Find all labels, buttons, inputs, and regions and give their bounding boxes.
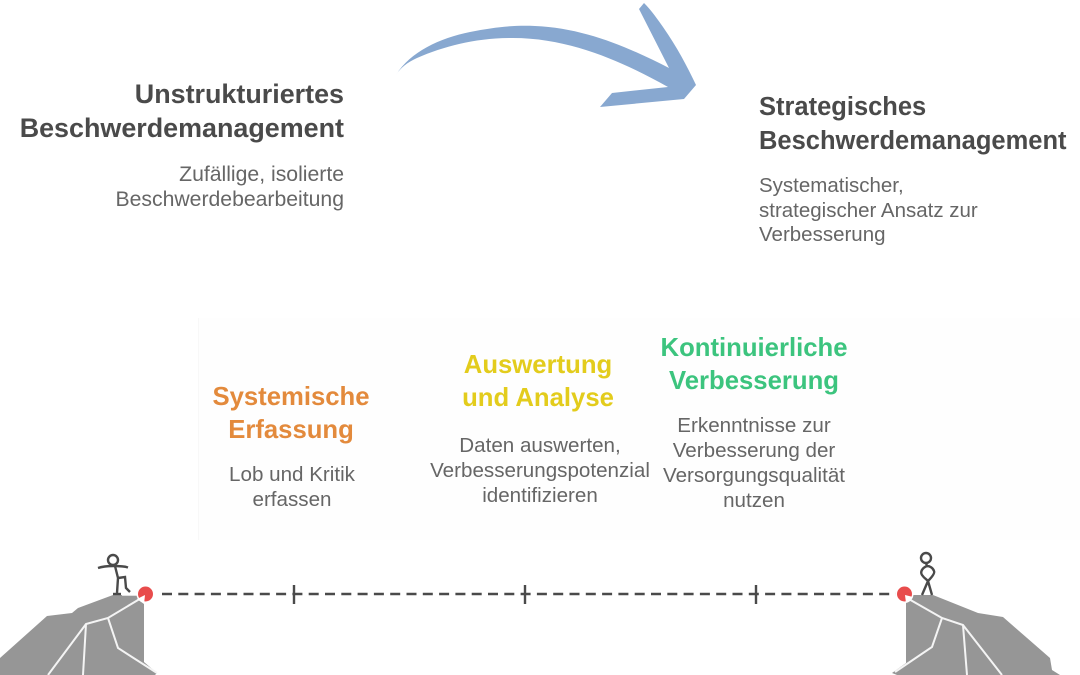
text: Auswertung und Analyse description: Verbesserungspotenzial [430, 459, 650, 482]
heading: Unstrukturiertes Beschwerdemanagement: Beschwerdemanagement [20, 113, 344, 143]
heading: Strategisches Beschwerdemanagement: Strategisches [759, 92, 926, 120]
text: Kontinuierliche Verbesserung description: Versorgungsqualität [663, 464, 845, 487]
heading: Auswertung und Analyse: Auswertung [464, 351, 612, 379]
heading: Kontinuierliche Verbesserung: Kontinuierliche [661, 334, 847, 362]
heading: Kontinuierliche Verbesserung [661, 334, 847, 395]
text: Kontinuierliche Verbesserung description [663, 414, 845, 512]
heading: Systemische Erfassung: Systemische [212, 383, 370, 411]
text: unstructured description [115, 163, 344, 211]
heading: Strategisches Beschwerdemanagement: Beschwerdemanagement [759, 126, 1067, 154]
heading: Systemische Erfassung [212, 383, 370, 444]
text: Kontinuierliche Verbesserung description: nutzen [723, 489, 785, 512]
text: Auswertung und Analyse description: identifizieren [482, 484, 598, 507]
text: strategic description: strategischer Ansatz zur [759, 198, 978, 222]
heading: Unstrukturiertes Beschwerdemanagement: Unstrukturiertes [135, 79, 344, 109]
text: Systemische Erfassung description: Lob und Kritik [229, 463, 355, 486]
text: Kontinuierliche Verbesserung description: Erkenntnisse zur [677, 414, 831, 437]
heading: Auswertung und Analyse: und Analyse [462, 384, 614, 412]
text: Auswertung und Analyse description: Daten auswerten, [459, 434, 621, 457]
text: strategic description: Systematischer, [759, 174, 904, 197]
text: Systemische Erfassung description [229, 463, 355, 511]
text: unstructured description: Beschwerdebearbeitung [115, 188, 344, 211]
text: strategic description: Verbesserung [759, 223, 886, 246]
text: Auswertung und Analyse description [430, 434, 650, 507]
heading: Strategisches Beschwerdemanagement [759, 92, 1067, 154]
text: Systemische Erfassung description: erfassen [252, 488, 332, 511]
text: strategic description [759, 174, 978, 246]
heading: Auswertung und Analyse [462, 351, 614, 412]
text: unstructured description: Zufällige, isolierte [179, 163, 344, 186]
heading: Kontinuierliche Verbesserung: Verbesserung [669, 367, 839, 395]
text: Kontinuierliche Verbesserung description: Verbesserung der [673, 439, 835, 462]
heading: Systemische Erfassung: Erfassung [228, 416, 354, 444]
heading: Unstrukturiertes Beschwerdemanagement [20, 79, 344, 143]
